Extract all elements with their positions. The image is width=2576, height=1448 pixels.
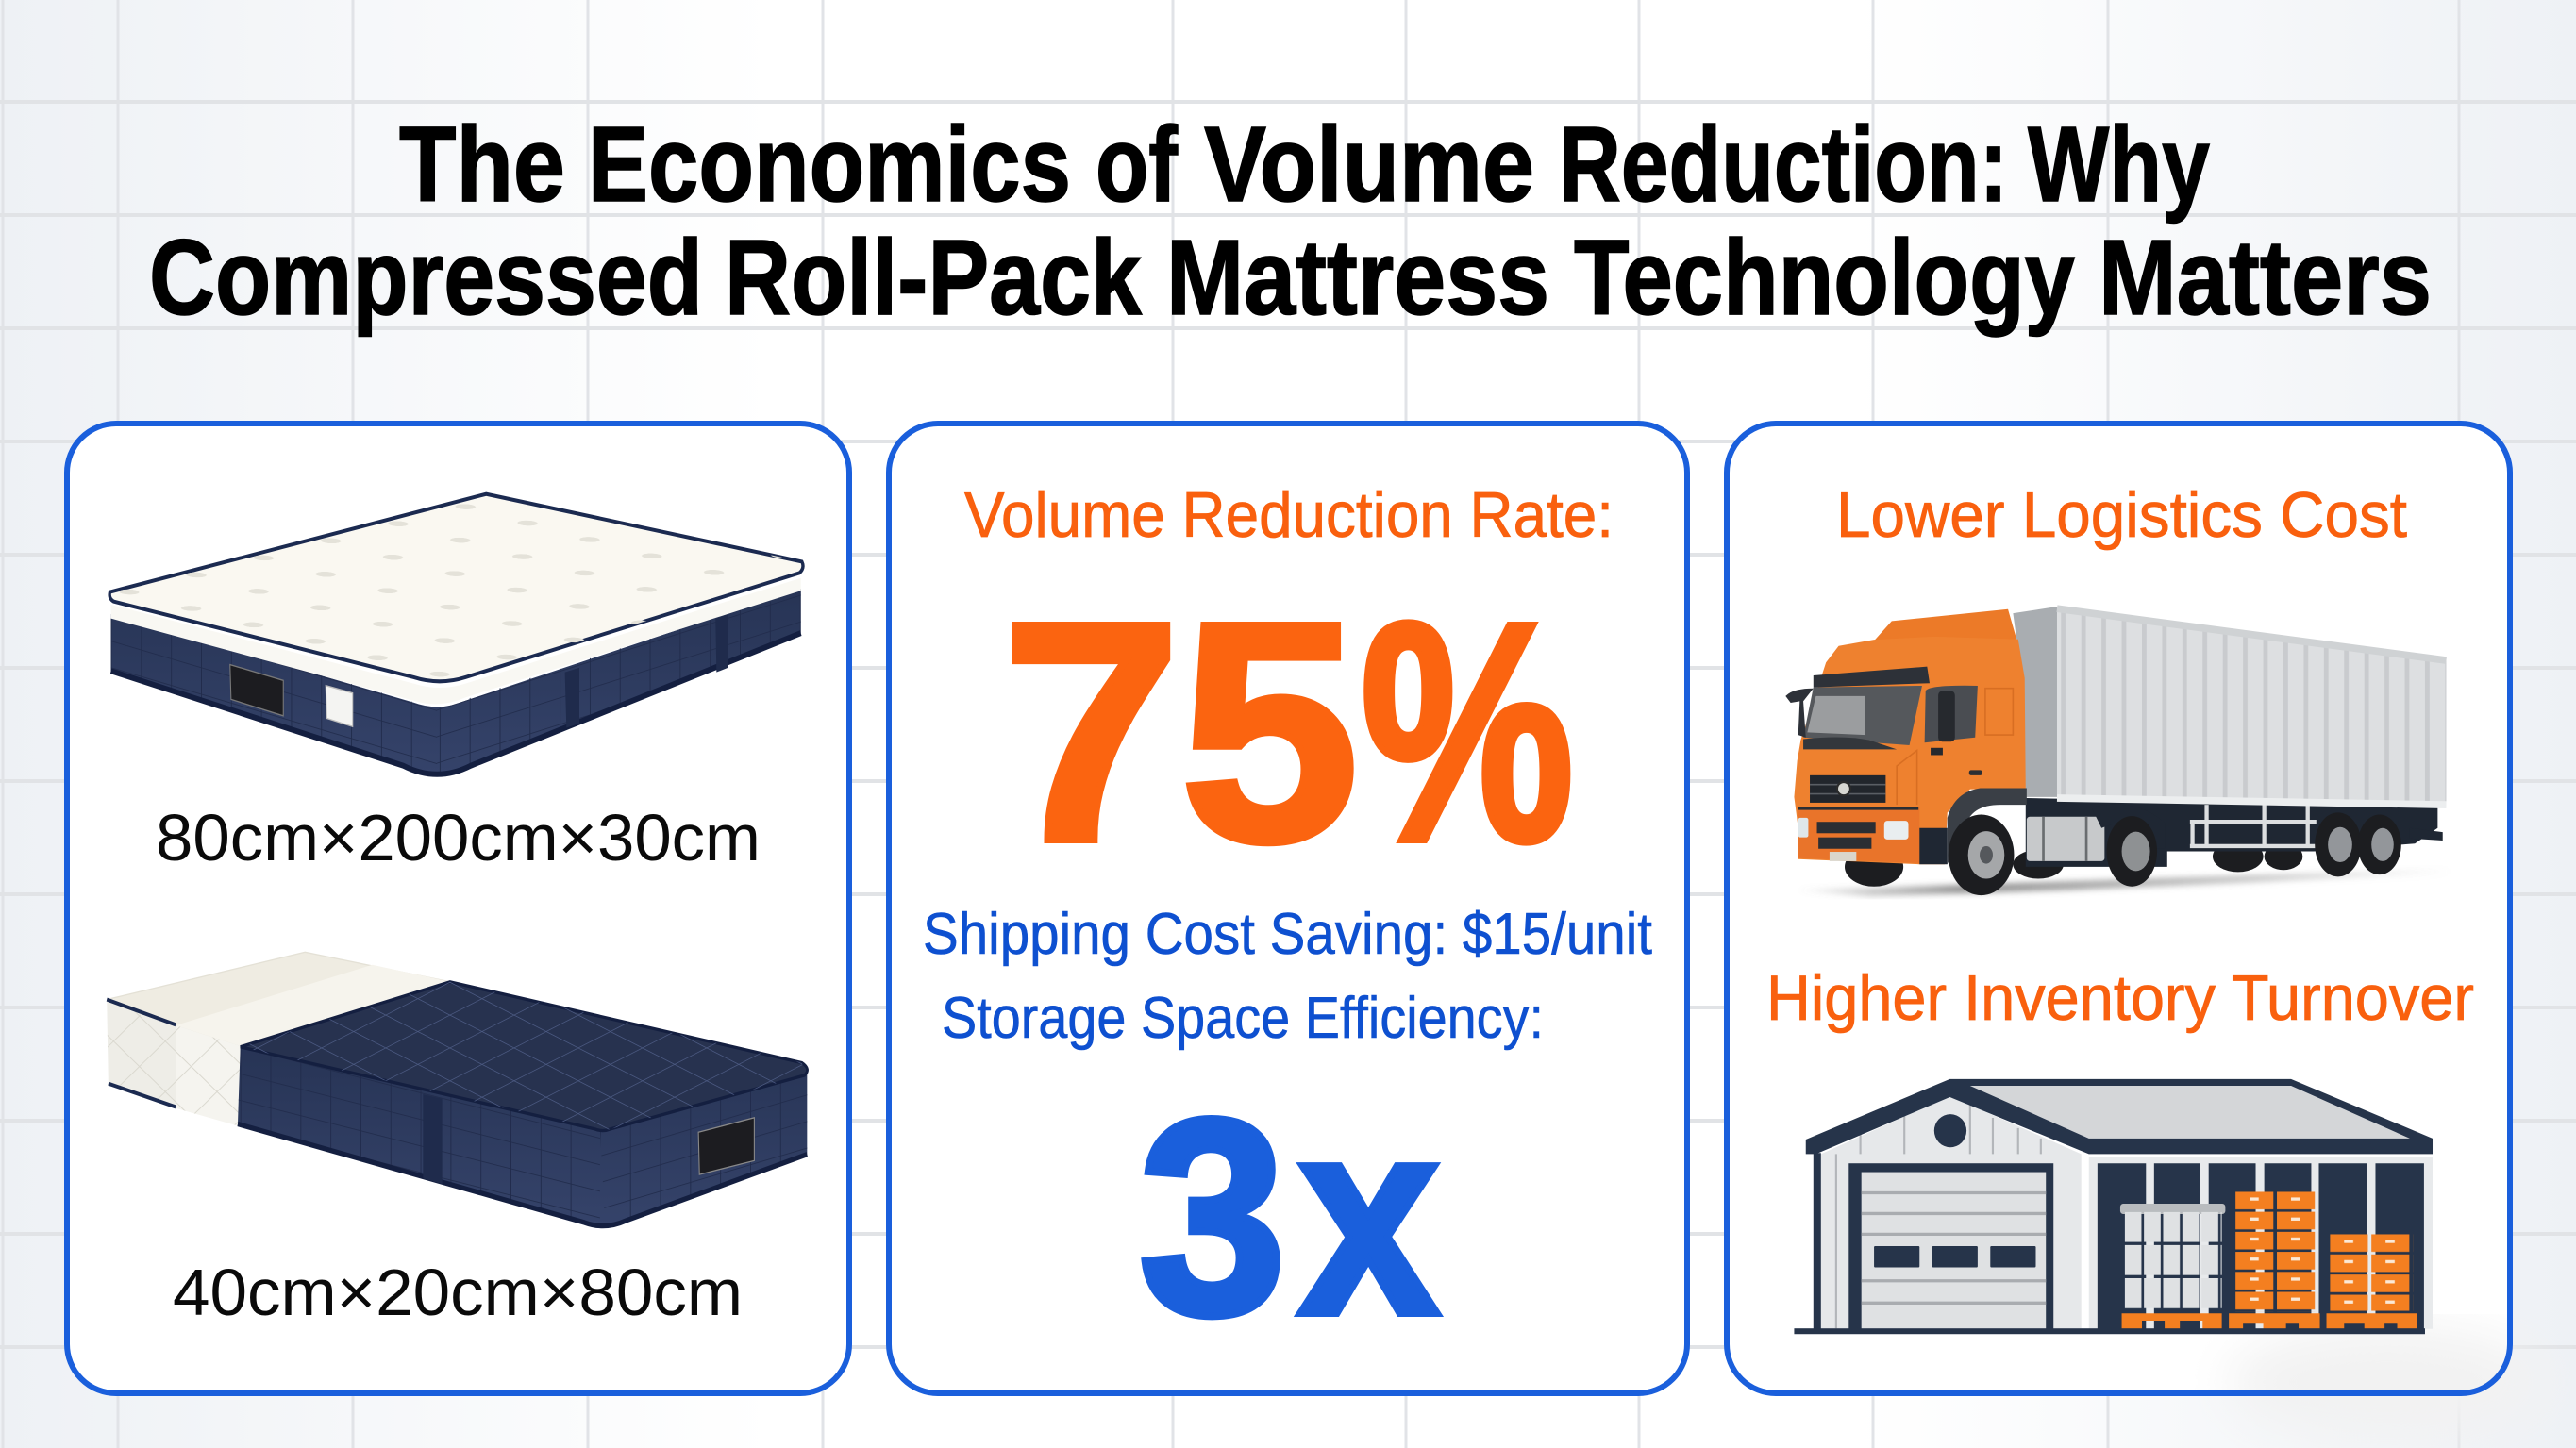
big number: 75%: % — [1361, 558, 1574, 906]
big number: 3x — [1139, 1061, 1441, 1373]
title: Mattress — [1166, 218, 1549, 337]
title: Reduction: — [1559, 105, 2008, 224]
heading: volume reduction rate: Volume Reduction Rate: — [964, 479, 1614, 551]
title: Roll-Pack — [725, 218, 1142, 337]
big number: 75%: 75 — [1002, 558, 1359, 906]
title: Volume — [1204, 105, 1534, 224]
title: Why — [2028, 105, 2210, 224]
panel: mattress sizes — [67, 424, 849, 1393]
text: storage efficiency: Storage Space Efficiency: — [942, 986, 1544, 1051]
title: of — [1096, 105, 1178, 224]
panel: key metrics — [889, 424, 1687, 1393]
icon: truck — [1785, 607, 2451, 896]
title: Compressed — [149, 218, 703, 337]
text: compressed size: 40cm×20cm×80cm — [173, 1256, 743, 1329]
title — [149, 105, 2432, 337]
text: original size: 80cm×200cm×30cm — [156, 801, 761, 874]
heading: higher inventory turnover: Higher Inventory Turnover — [1766, 962, 2474, 1034]
title: The — [399, 105, 565, 224]
icon: uncompressed mattress — [109, 494, 803, 776]
title: Technology — [1574, 218, 2075, 337]
icon: warehouse — [1794, 1079, 2433, 1334]
smudge: lower right shading — [2227, 1325, 2548, 1439]
text: shipping saving: Shipping Cost Saving: $15/unit — [923, 902, 1652, 967]
big number: 3x: 3 — [1139, 1061, 1286, 1373]
panel border — [1727, 424, 2510, 1393]
big number: 75% — [1002, 558, 1574, 906]
heading: lower logistics cost: Lower Logistics Cost — [1836, 479, 2407, 551]
title: Matters — [2099, 218, 2432, 337]
icon: compressed mattress — [107, 952, 808, 1227]
big number: 3x: x — [1298, 1061, 1441, 1373]
title: Economics — [588, 105, 1071, 224]
panel: logistics and inventory — [1727, 424, 2548, 1439]
